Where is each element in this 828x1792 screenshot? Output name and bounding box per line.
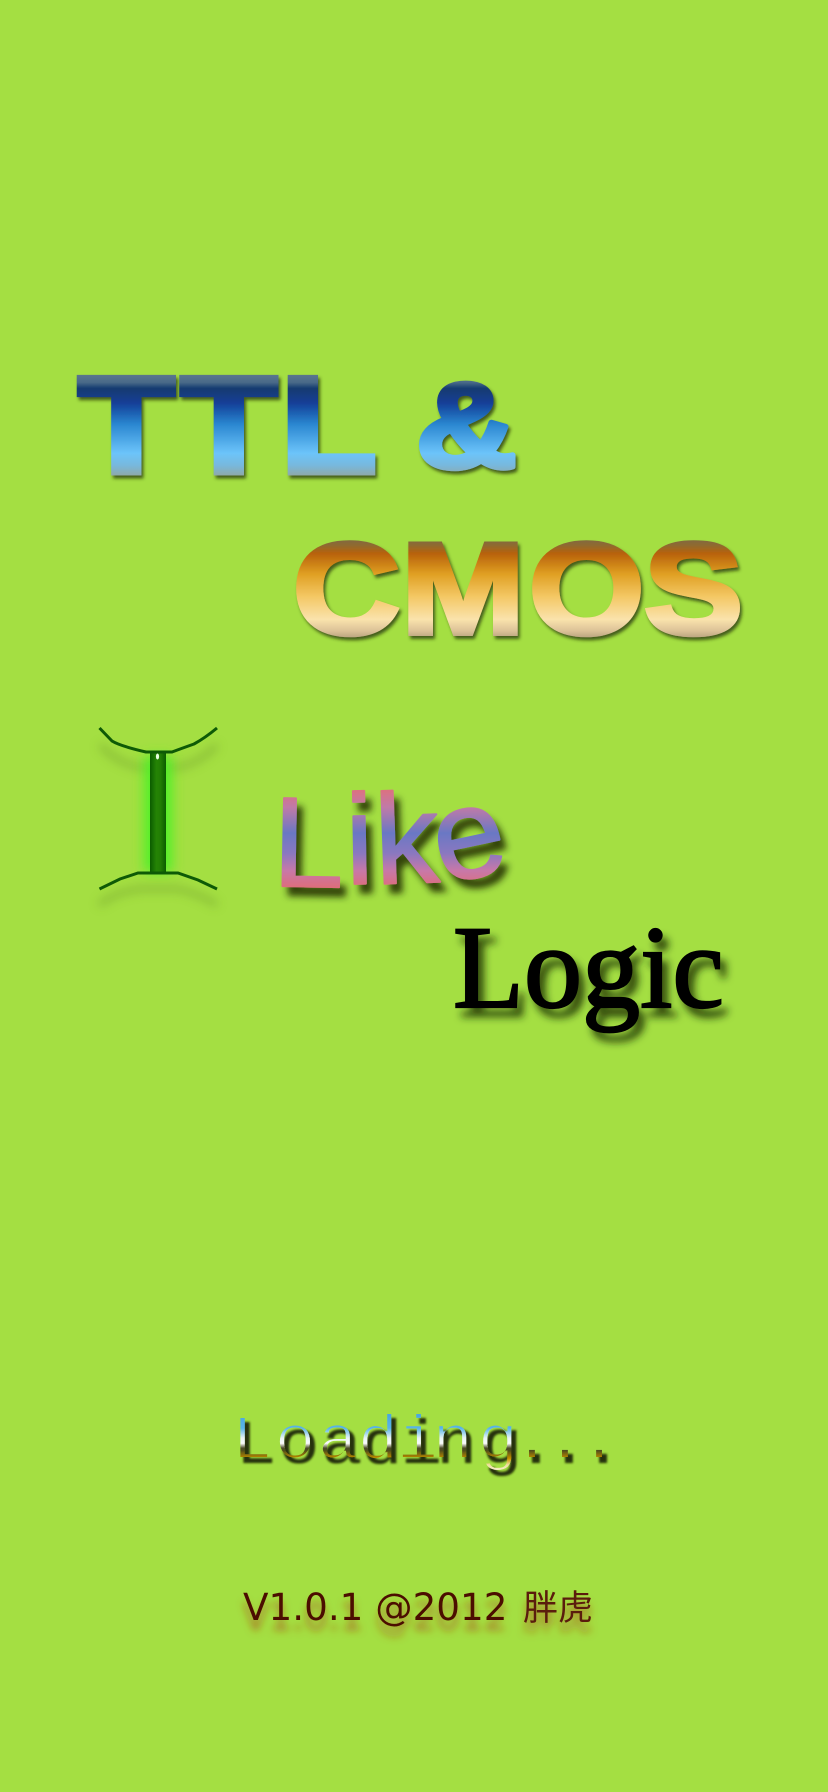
icon: letter I with curved serifs	[99, 728, 217, 905]
icon shadow	[99, 745, 217, 905]
text: Like: e	[418, 757, 517, 911]
stem glow	[144, 756, 172, 872]
text: Like	[272, 757, 517, 915]
text: version and author: V1.0.1 @2012	[243, 1585, 507, 1629]
text: Logic: Logic	[453, 902, 724, 1033]
text: version and author: 胖虎	[523, 1589, 593, 1628]
text: Like: k	[372, 767, 442, 912]
text: Like: L	[272, 771, 345, 915]
highlight	[156, 754, 159, 760]
title: TTL: TTL	[79, 349, 376, 501]
title: ampersand: &	[416, 357, 517, 493]
text: Like: i	[344, 769, 375, 912]
top and bottom serifs	[100, 728, 217, 889]
stem	[150, 752, 166, 873]
text: Loading: Loading...	[232, 1407, 620, 1477]
title: CMOS: CMOS	[293, 516, 743, 661]
